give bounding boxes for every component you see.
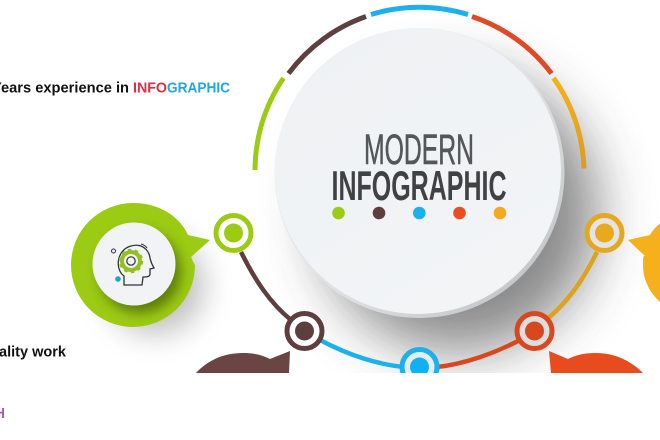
connector: brown — [241, 252, 291, 320]
connector: red — [437, 340, 520, 367]
panel: central disc — [274, 28, 564, 318]
white disc — [92, 222, 176, 306]
connector path — [241, 252, 597, 367]
icon: head with gear — [112, 244, 154, 285]
node: red — [517, 314, 552, 348]
text: experience line — [0, 80, 230, 96]
connector: yellow — [546, 252, 597, 320]
text: experience line: GRAPHIC — [167, 80, 230, 96]
text: quality work: ality work — [0, 344, 67, 360]
text: experience line: INFO — [133, 80, 167, 96]
panel: outer ring segments — [255, 7, 584, 170]
arc: blue — [371, 7, 468, 14]
bubble: yellow — [628, 224, 660, 302]
node: yellow — [587, 216, 622, 250]
bubble: green — [71, 203, 210, 327]
node: brown — [287, 314, 322, 348]
connector: blue — [320, 340, 405, 367]
arc: red — [472, 16, 552, 74]
title: MODERN: MODERN — [364, 126, 474, 174]
bubble: brown — [196, 351, 290, 373]
arc: yellow — [554, 78, 584, 168]
shadow: green bubble disc — [99, 231, 181, 313]
arc: brown — [288, 16, 366, 74]
legend dots — [332, 207, 506, 219]
shadow: central disc — [318, 72, 598, 352]
arc: green — [255, 78, 284, 170]
node: blue — [400, 347, 440, 373]
title: INFOGRAPHIC: INFOGRAPHIC — [332, 162, 506, 209]
node: green — [216, 216, 251, 250]
bubble: red — [549, 351, 643, 373]
shadow: green bubble — [105, 235, 205, 335]
